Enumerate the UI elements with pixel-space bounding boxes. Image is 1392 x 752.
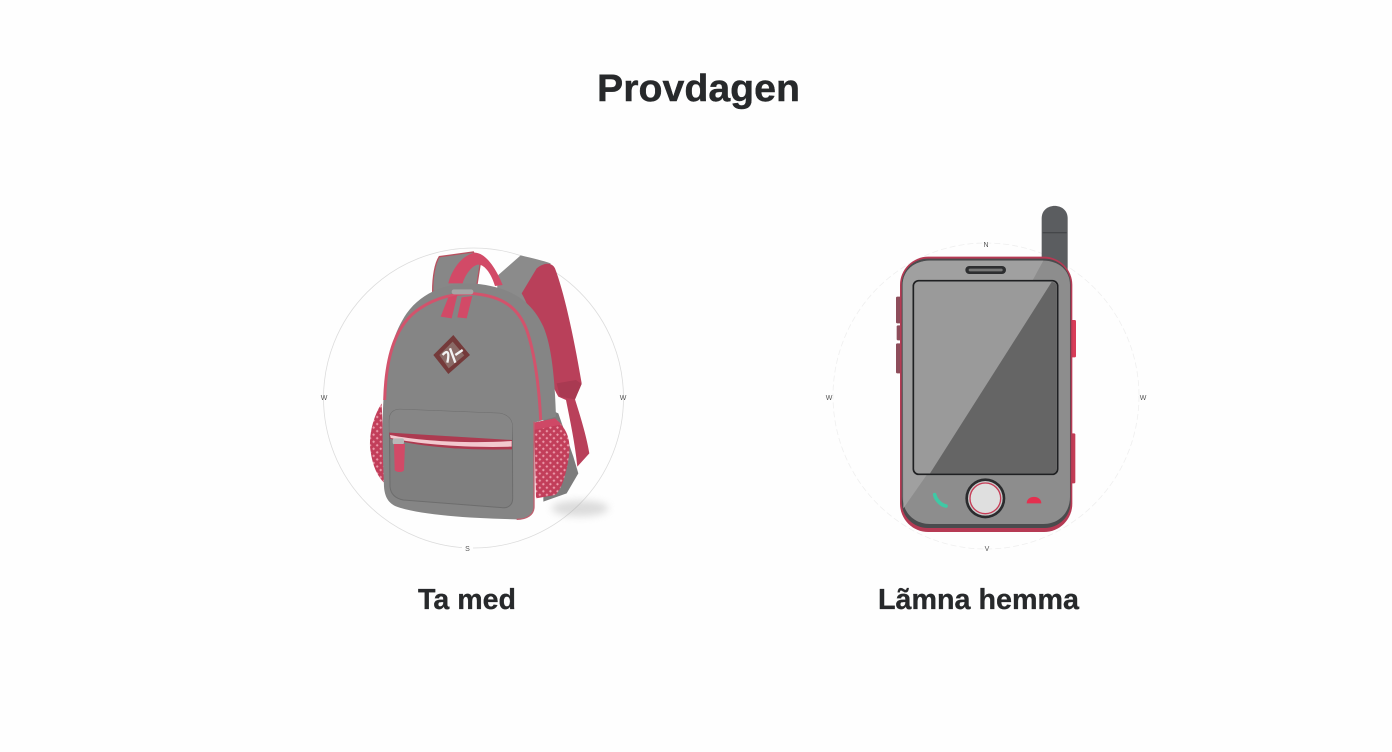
ground shadow — [552, 500, 608, 516]
compass ring: backpack: W — [620, 395, 627, 402]
compass ring: backpack — [321, 248, 627, 553]
right mesh pocket — [534, 418, 570, 498]
title: Provdagen — [597, 68, 800, 110]
label: ta med: Ta med — [418, 584, 516, 616]
back panel bottom — [543, 407, 578, 502]
left mesh pocket — [370, 403, 385, 483]
right gray strap — [497, 255, 551, 307]
side buttons — [896, 297, 1076, 483]
speaker — [965, 266, 1006, 274]
compass ring: backpack: W — [321, 395, 328, 402]
top zipper piping — [385, 293, 541, 420]
panel: ta med — [321, 248, 627, 616]
red handle — [448, 253, 503, 286]
zipper pulls — [441, 289, 473, 318]
backpack body — [383, 283, 556, 519]
label: lämna hemma: Lãmna hemma — [878, 584, 1080, 616]
compass ring: phone: V — [985, 546, 990, 553]
front pocket — [389, 409, 513, 508]
compass ring: phone — [826, 242, 1147, 553]
icon: mobile phone — [896, 206, 1076, 532]
screen — [913, 281, 1058, 474]
compass ring: backpack: S — [465, 546, 470, 553]
pocket zipper — [389, 433, 512, 450]
lighter bezel corner — [903, 261, 1043, 508]
panel: lämna hemma — [826, 206, 1147, 616]
compass ring: phone: N — [983, 242, 989, 249]
antenna — [1042, 206, 1068, 277]
compass ring: phone: W — [1140, 395, 1147, 402]
icon: backpack — [370, 252, 608, 519]
compass ring: phone: W — [826, 395, 833, 402]
home button — [965, 478, 1005, 518]
diamond patch — [433, 335, 470, 374]
gray top loop — [433, 252, 480, 292]
icon: hang up — [1027, 497, 1041, 503]
phone body — [900, 257, 1072, 532]
icon: call — [935, 495, 946, 506]
red padded strap — [522, 264, 589, 467]
